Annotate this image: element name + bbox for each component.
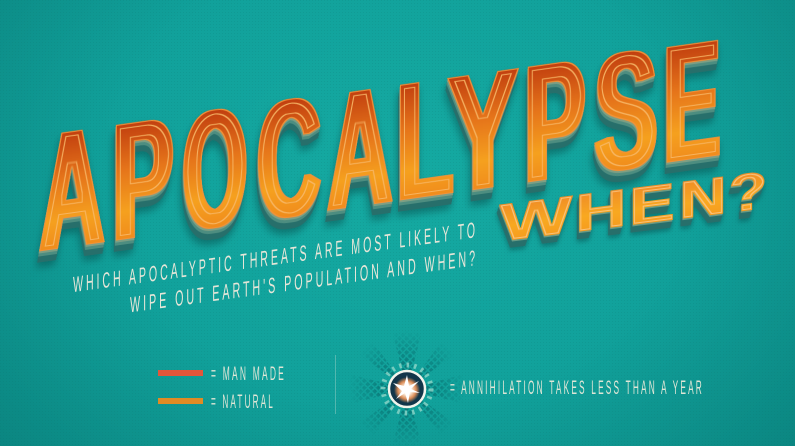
title: When?: W [500, 185, 572, 254]
title: Apocalypse: Y [448, 32, 518, 230]
title: When?: E [629, 171, 675, 238]
title: Apocalypse: A [40, 90, 104, 288]
subtitle [73, 217, 478, 325]
title: Apocalypse: P [525, 23, 585, 219]
title: When?: ? [729, 160, 767, 225]
title: Apocalypse: S [595, 11, 657, 209]
title: Apocalypse: O [183, 71, 247, 268]
legend: line types: = NATURAL [211, 392, 275, 413]
legend: line types [158, 364, 286, 413]
title: Apocalypse: E [664, 5, 720, 200]
title: When?: N [680, 165, 726, 231]
title: Apocalypse: P [113, 81, 173, 277]
title: When? [500, 159, 767, 254]
title: Apocalypse: C [257, 61, 321, 257]
text: = MAN MADE [211, 364, 286, 385]
title: Apocalypse: L [397, 41, 453, 237]
title: Apocalypse [40, 3, 720, 288]
title: Apocalypse: A [328, 49, 392, 247]
title: When?: H [576, 178, 626, 244]
icon: annihilation burst [356, 338, 458, 438]
